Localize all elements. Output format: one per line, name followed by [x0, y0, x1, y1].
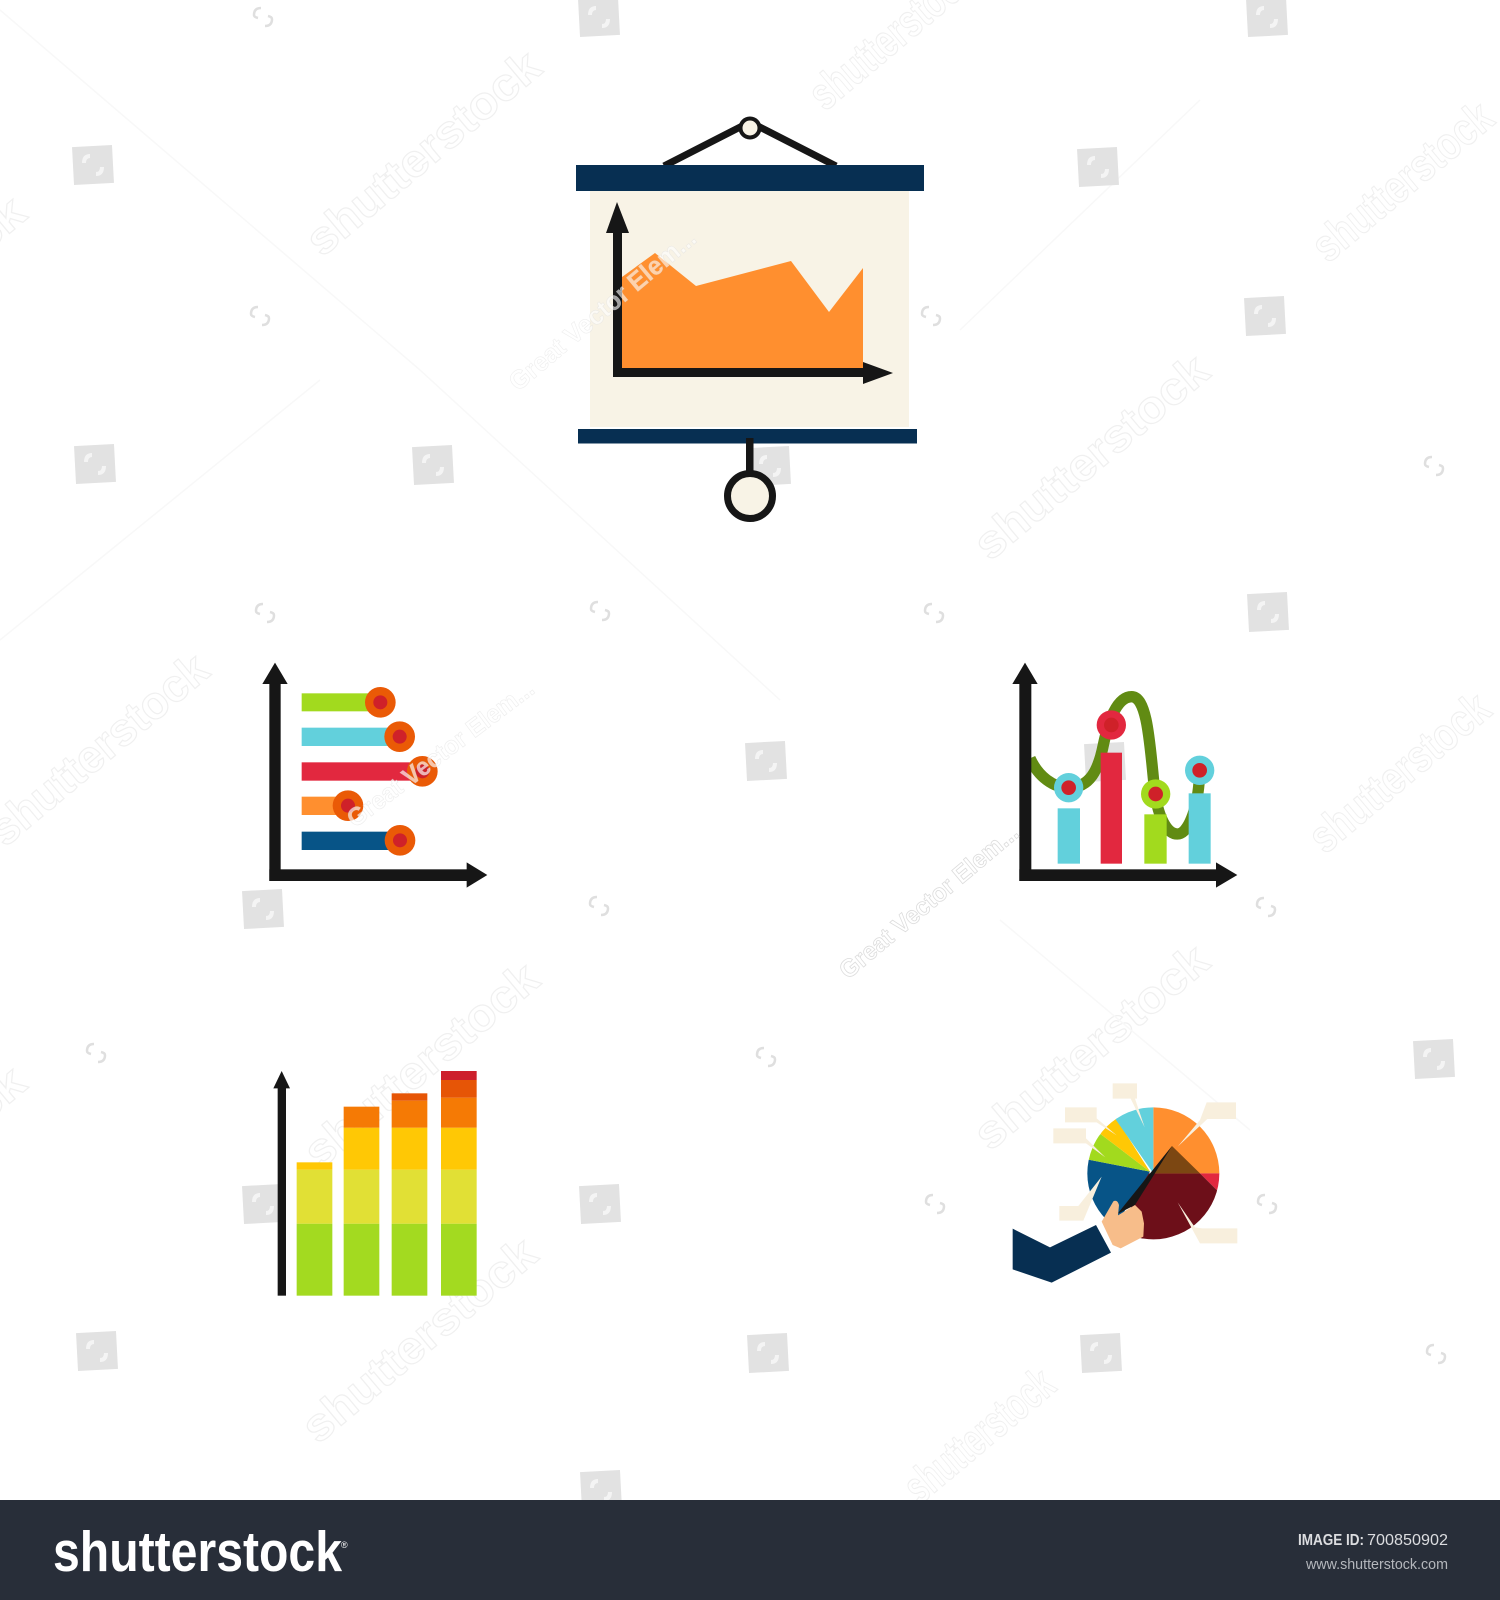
pull ring — [728, 474, 772, 518]
icon: projector screen with area chart — [503, 118, 924, 518]
overlay watermark text: Great Vector Elem... — [503, 223, 702, 397]
hanging cord — [664, 122, 836, 166]
watermark layer: shutterstock — [893, 1357, 1065, 1513]
image id: IMAGE ID: — [1298, 1532, 1364, 1549]
image id: 700850902 — [1367, 1532, 1448, 1549]
hand — [1102, 1201, 1144, 1248]
watermark layer: shutterstock — [293, 951, 549, 1178]
site url: www.shutterstock.com — [1305, 1557, 1448, 1573]
pie slices — [1087, 1107, 1220, 1240]
top roller bar — [576, 165, 924, 191]
stacked bar 3 — [392, 1093, 427, 1296]
registered mark: ® — [341, 1540, 348, 1550]
vertical axis arrow — [273, 1071, 290, 1296]
bar: green — [302, 687, 396, 718]
pull cord — [746, 438, 754, 478]
bar: cyan — [302, 721, 415, 752]
bar: orange — [302, 790, 363, 821]
sleeve — [1013, 1225, 1111, 1283]
bars — [1058, 753, 1211, 864]
chart axes — [606, 202, 893, 384]
watermark layer: shutterstock — [963, 343, 1219, 570]
pointer stick — [1117, 1146, 1172, 1214]
callouts — [1053, 1083, 1237, 1243]
watermark layer: shutterstock — [963, 933, 1219, 1160]
bottom bar — [578, 429, 917, 444]
stacked bar 2 — [344, 1107, 379, 1296]
overlay watermark text: Great Vector Elem... — [342, 674, 540, 833]
bar: blue — [302, 825, 415, 856]
trend curve — [1030, 697, 1199, 834]
bar: red — [302, 756, 438, 787]
axes — [1012, 663, 1237, 888]
markers — [1054, 710, 1214, 809]
icon: stacked bar chart — [273, 1071, 477, 1296]
stacked bar 1 — [297, 1162, 332, 1296]
overlay watermark text: Great Vector Elem... — [834, 819, 1024, 985]
stacked bar 4 — [441, 1071, 477, 1296]
footer bar — [0, 1500, 1500, 1600]
icon: pie chart with presenter hand — [1013, 1083, 1237, 1283]
footer logo: shutterstock — [53, 1520, 342, 1584]
icon: horizontal bar chart with dots — [262, 663, 540, 888]
icon: bars with curve — [1012, 663, 1237, 888]
watermark layer: shutterstock — [295, 39, 551, 266]
projection screen — [590, 191, 909, 427]
hanger ring — [740, 118, 760, 138]
watermark layer: shutterstock — [291, 1226, 547, 1453]
axes — [262, 663, 487, 888]
area chart — [622, 253, 863, 368]
